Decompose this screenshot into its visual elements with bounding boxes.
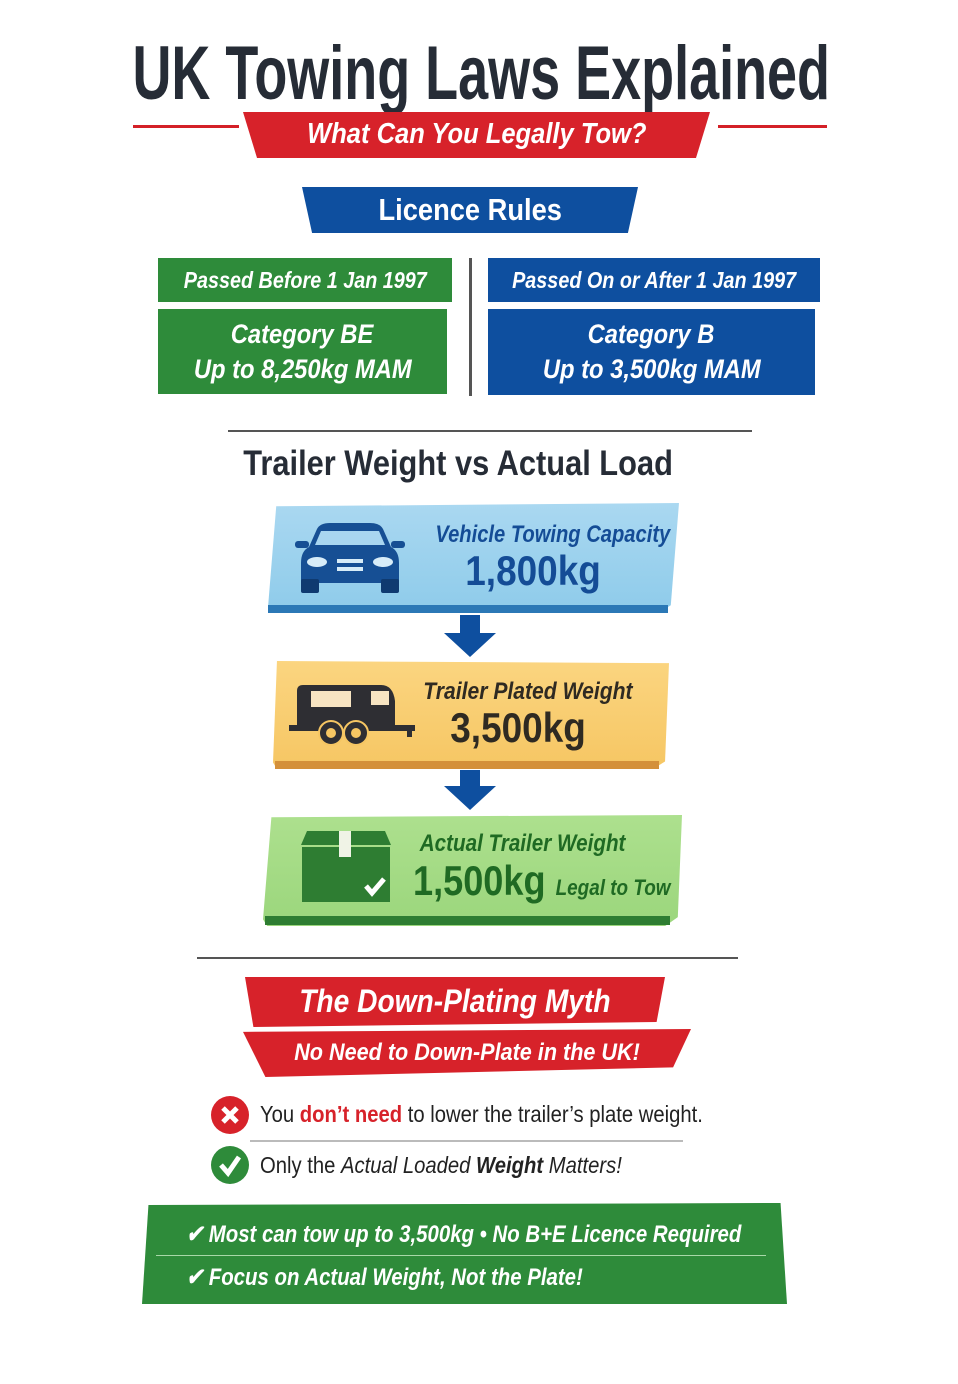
panel: after 1997 (488, 258, 820, 395)
panel: summary: ✔ Most can tow up to 3,500kg • No B+E Licence Required (186, 1221, 741, 1248)
arrow (444, 770, 496, 810)
panel: before 1997: Category BE (231, 319, 374, 349)
panel: after 1997: Up to 3,500kg MAM (543, 354, 760, 384)
panel: vehicle towing capacity: 1,800kg (465, 547, 601, 594)
heading: licence rules (302, 187, 638, 233)
item: actual weight matters (211, 1146, 622, 1184)
panel: before 1997 (158, 258, 452, 394)
icon: box with check (301, 831, 391, 902)
subtitle banner (133, 112, 827, 158)
panel: before 1997: Up to 8,250kg MAM (194, 354, 411, 384)
subtitle banner: What Can You Legally Tow? (307, 118, 646, 150)
panel: after 1997: Category B (588, 319, 715, 349)
panel: actual trailer weight: 1,500kg Legal to Tow (413, 857, 671, 904)
panel: trailer plated weight (273, 661, 669, 769)
title: UK Towing Laws Explained (132, 31, 830, 116)
banner: no need to down-plate (243, 1029, 691, 1077)
panel: vehicle towing capacity (268, 503, 679, 613)
banner: down-plating myth (245, 977, 665, 1027)
heading: trailer weight vs actual load: Trailer Weight vs Actual Load (243, 444, 673, 483)
item: don't need: You don’t need to lower the trailer’s plate weight. (260, 1101, 703, 1127)
banner: down-plating myth: The Down-Plating Myth (299, 983, 611, 1019)
panel: actual trailer weight: Actual Trailer Weight (420, 830, 625, 857)
panel: actual trailer weight (263, 815, 682, 926)
banner: no need to down-plate: No Need to Down-Plate in the UK! (294, 1039, 640, 1066)
item: actual weight matters: Only the Actual Loaded Weight Matters! (260, 1152, 622, 1178)
panel: summary: ✔ Focus on Actual Weight, Not the Plate! (186, 1264, 583, 1291)
panel: trailer plated weight: 3,500kg (450, 704, 586, 751)
panel: trailer plated weight: Trailer Plated Weight (423, 678, 633, 705)
icon: caravan (289, 685, 415, 744)
panel: vehicle towing capacity: Vehicle Towing Capacity (435, 521, 670, 548)
heading: licence rules: Licence Rules (378, 192, 562, 227)
panel: summary (142, 1203, 787, 1304)
arrow (444, 615, 496, 657)
panel: after 1997: Passed On or After 1 Jan 1997 (512, 267, 796, 293)
panel: before 1997: Passed Before 1 Jan 1997 (183, 267, 427, 293)
item: don't need (211, 1096, 703, 1134)
icon: car (295, 523, 405, 593)
